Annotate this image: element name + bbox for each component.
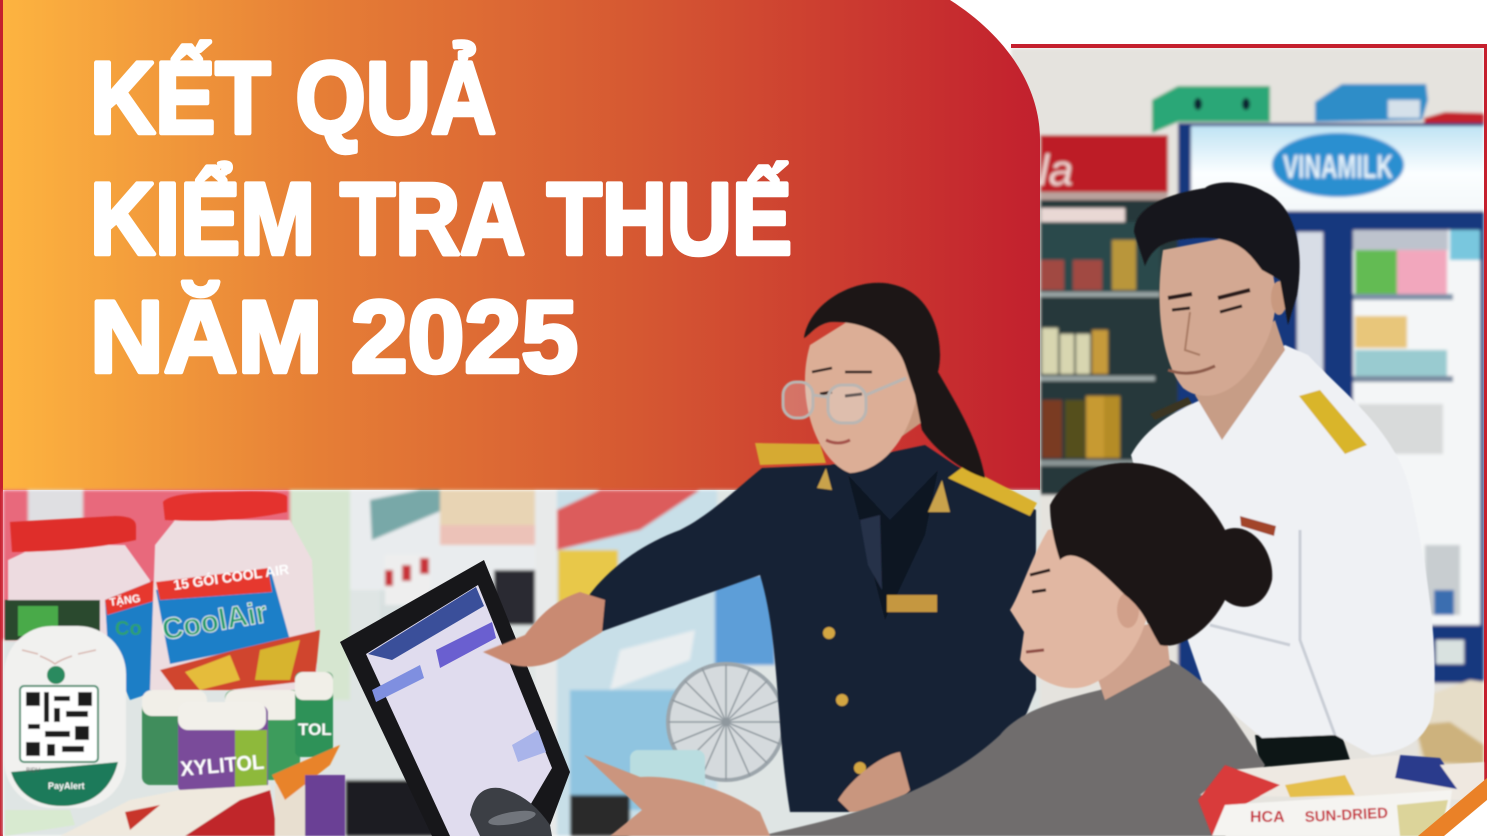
red awning xyxy=(1424,112,1484,127)
right jar xyxy=(150,492,318,690)
electric fan xyxy=(630,664,784,800)
seated woman face features xyxy=(1026,570,1050,652)
drinks cooler xyxy=(1040,200,1180,495)
man hair xyxy=(1134,182,1300,325)
blue carton xyxy=(1315,84,1428,122)
lower hand xyxy=(838,752,910,812)
glasses xyxy=(783,378,906,423)
vinamilk fridge xyxy=(1178,123,1484,683)
candy packets xyxy=(160,630,320,690)
cool air label: 15 GÓI COOL AIR xyxy=(172,560,290,593)
epaulettes and badges xyxy=(755,443,1037,774)
dark hair and bun xyxy=(1050,463,1272,646)
neck and face xyxy=(1085,620,1170,700)
left edge strip xyxy=(0,0,3,836)
coca-cola sign xyxy=(1039,135,1168,201)
POS monitor xyxy=(340,560,570,836)
coca-cola sign: la xyxy=(1039,146,1073,195)
vinamilk fridge: VINAMILK xyxy=(1283,148,1393,185)
cool air label xyxy=(156,560,290,664)
snack packs foreground xyxy=(1198,755,1484,836)
QR stand: BIDV xyxy=(26,768,40,774)
pointing lower hand xyxy=(584,755,770,836)
gum tubs xyxy=(142,672,333,793)
title: KIỂM TRA THUẾ xyxy=(90,162,792,276)
green tray and red box xyxy=(5,745,345,836)
woman face features xyxy=(812,368,872,443)
pointing hand xyxy=(483,592,605,667)
title: KẾT QUẢ xyxy=(90,41,496,155)
candy jars and QR stand xyxy=(4,492,345,836)
main title banner xyxy=(3,0,1040,490)
man in white uniform xyxy=(1131,182,1435,770)
top-right photo frame xyxy=(1011,44,1487,836)
man epaulettes xyxy=(1299,390,1367,454)
man face features xyxy=(1168,290,1250,373)
left jar cards xyxy=(5,600,100,640)
left jar label: Co xyxy=(115,618,142,640)
neck and face xyxy=(850,360,925,470)
title xyxy=(90,41,792,394)
snack packs foreground: SUN-DRIED xyxy=(1304,805,1389,826)
navy jacket and arm xyxy=(572,445,1036,812)
photo: store background right xyxy=(1011,48,1484,836)
left jar xyxy=(8,516,150,640)
barcode scanner xyxy=(470,788,552,836)
left jar label xyxy=(105,580,160,700)
QR stand: PayAlert xyxy=(48,781,85,791)
photo: counter and shelves lower left xyxy=(3,490,1040,836)
man trousers xyxy=(1255,730,1350,770)
cool air label: CoolAir xyxy=(159,596,270,647)
title: NĂM 2025 xyxy=(90,280,578,394)
gray sweater xyxy=(760,660,1265,836)
left jar label: TẶNG xyxy=(109,592,141,609)
QR stand xyxy=(4,626,126,808)
green carton xyxy=(1152,86,1270,133)
gum tubs: TOL xyxy=(298,720,332,739)
man shirt xyxy=(1131,345,1435,755)
corner accent xyxy=(1418,778,1487,836)
hair with ponytail xyxy=(804,283,985,478)
gum tubs: XYLITOL xyxy=(179,751,265,781)
seated woman in gray top xyxy=(584,463,1272,836)
man neck and head xyxy=(1195,320,1285,440)
standing woman in navy uniform xyxy=(483,283,1037,812)
snack packs right xyxy=(1415,680,1484,770)
snack packs foreground: HCA xyxy=(1250,809,1285,826)
